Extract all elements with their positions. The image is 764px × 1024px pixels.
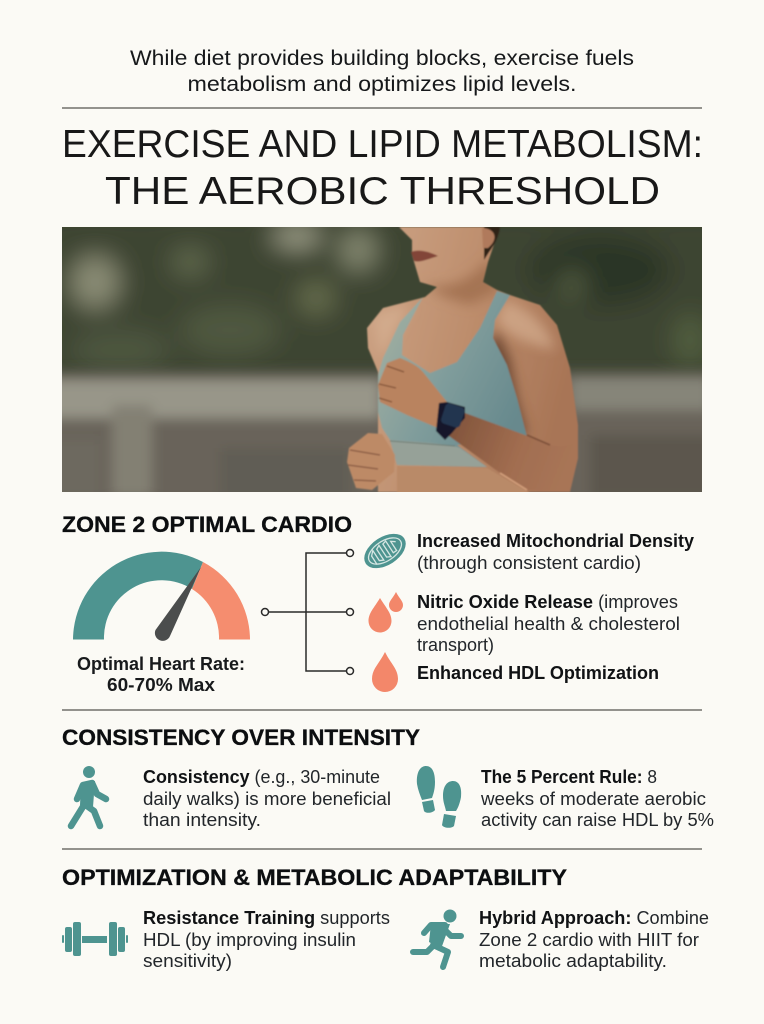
heading: consistency: CONSISTENCY OVER INTENSITY <box>62 725 420 750</box>
benefit: HDL: Enhanced HDL Optimization <box>417 663 659 683</box>
icon: mitochondrion <box>358 527 412 575</box>
text: resistance training: Resistance Training supports <box>143 908 390 928</box>
raised hand <box>378 358 447 428</box>
text: hybrid approach: Zone 2 cardio with HIIT for <box>479 930 699 950</box>
icon: droplets <box>368 592 403 632</box>
benefit: mitochondrial density: (through consistent cardio) <box>417 553 641 573</box>
benefit: nitric oxide: endothelial health & cholesterol <box>417 614 680 634</box>
smartwatch <box>436 402 465 440</box>
text: hybrid approach <box>479 908 709 971</box>
benefit: nitric oxide: Nitric Oxide Release (improves <box>417 592 678 612</box>
midriff <box>397 466 530 493</box>
text: consistency: than intensity. <box>143 810 261 830</box>
text: 5 percent rule: activity can raise HDL by 5% <box>481 810 714 830</box>
text: 5 percent rule: The 5 Percent Rule: 8 <box>481 767 657 787</box>
text: 5 percent rule <box>480 767 714 830</box>
title <box>62 123 703 213</box>
title: EXERCISE AND LIPID METABOLISM: <box>62 123 703 166</box>
forearm <box>448 412 538 487</box>
benefit: mitochondrial density <box>417 531 694 573</box>
gauge label: 60-70% Max <box>107 675 215 695</box>
text: consistency <box>143 767 391 830</box>
text: consistency: Consistency (e.g., 30-minute <box>143 767 380 787</box>
needle <box>155 567 201 641</box>
photo: woman jogging outdoors wearing a smartwatch <box>62 227 702 492</box>
icon: footprints <box>417 766 461 828</box>
text: hybrid approach: Hybrid Approach: Combine <box>479 908 709 928</box>
intro text: metabolism and optimizes lipid levels. <box>188 73 576 96</box>
icon: droplet <box>372 652 398 692</box>
connector tree <box>262 550 354 674</box>
text: 5 percent rule: weeks of moderate aerobic <box>480 789 706 809</box>
lips <box>411 251 438 262</box>
text: resistance training: sensitivity) <box>143 951 232 971</box>
hair and ear <box>484 227 500 260</box>
intro text <box>130 47 634 96</box>
icon: running person <box>413 910 461 967</box>
gauge label: Optimal Heart Rate: <box>77 654 245 674</box>
gauge label <box>77 654 245 695</box>
heading: zone 2: ZONE 2 OPTIMAL CARDIO <box>62 512 352 537</box>
icon: dumbbell <box>62 922 128 956</box>
sports bra <box>378 291 527 467</box>
lower hand <box>347 433 395 490</box>
neck shadow <box>432 262 496 306</box>
text: resistance training: HDL (by improving insulin <box>143 930 356 950</box>
benefit: mitochondrial density: Increased Mitochondrial Density <box>417 531 694 551</box>
heading: optimization: OPTIMIZATION & METABOLIC ADAPTABILITY <box>62 865 567 890</box>
intro text: While diet provides building blocks, exercise fuels <box>130 47 634 70</box>
text: resistance training <box>143 908 390 971</box>
icon: walking person <box>71 766 106 826</box>
title: THE AEROBIC THRESHOLD <box>105 170 660 213</box>
text: consistency: daily walks) is more beneficial <box>143 789 391 809</box>
benefit: nitric oxide: transport) <box>417 635 494 655</box>
benefit: nitric oxide <box>417 592 680 655</box>
gauge chart <box>73 552 250 641</box>
text: hybrid approach: metabolic adaptability. <box>479 951 667 971</box>
body: face, neck, chest and shoulders <box>360 227 585 492</box>
